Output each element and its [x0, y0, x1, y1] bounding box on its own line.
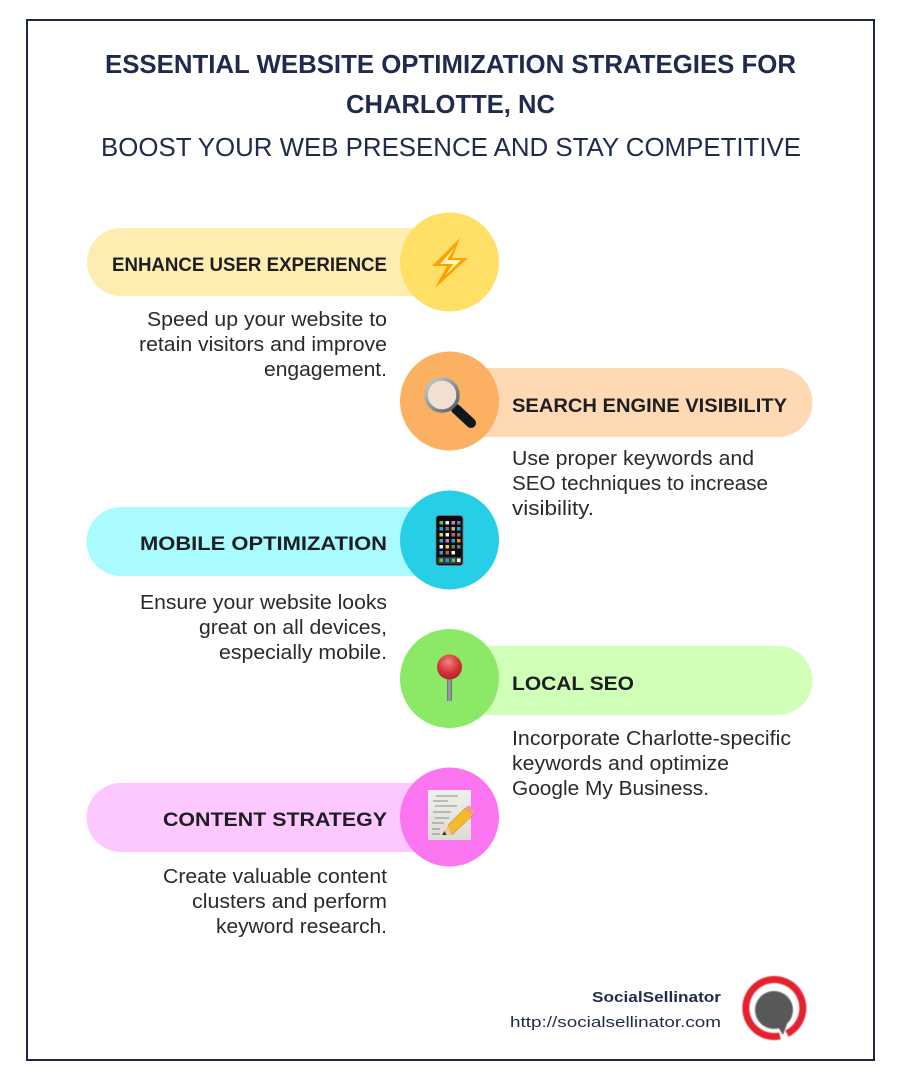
icon: memo and pencil: [428, 790, 474, 840]
description: clusters and perform: [192, 891, 387, 913]
heading: MOBILE OPTIMIZATION: [140, 533, 387, 555]
description: Google My Business.: [512, 778, 709, 800]
description: [512, 728, 791, 800]
logo: [746, 980, 803, 1037]
description: keyword research.: [216, 916, 387, 938]
description: [163, 866, 387, 938]
title block: [101, 49, 801, 162]
heading: ENHANCE USER EXPERIENCE: [112, 254, 387, 276]
description: great on all devices,: [199, 617, 387, 639]
website url: http://socialsellinator.com: [510, 1014, 721, 1031]
description: [512, 448, 768, 520]
circle: [400, 768, 499, 866]
description: engagement.: [264, 359, 387, 381]
pill: [460, 368, 813, 437]
panel: content strategy: [87, 768, 499, 938]
description: especially mobile.: [219, 642, 387, 664]
brand name: SocialSellinator: [592, 989, 721, 1006]
description: [140, 592, 387, 664]
heading: LOCAL SEO: [512, 673, 634, 695]
panel: enhance user experience: [87, 212, 499, 381]
description: Ensure your website looks: [140, 592, 387, 614]
title: ESSENTIAL WEBSITE OPTIMIZATION STRATEGIES FOR: [105, 49, 796, 79]
description: SEO techniques to increase: [512, 473, 768, 495]
icon: magnifying glass: [426, 379, 471, 423]
panel: local seo: [400, 629, 813, 800]
title: CHARLOTTE, NC: [346, 89, 555, 119]
pill: [87, 507, 440, 576]
subtitle: BOOST YOUR WEB PRESENCE AND STAY COMPETITIVE: [101, 132, 801, 162]
icon: lightning bolt: [432, 238, 468, 288]
icon: smartphone: [436, 516, 463, 566]
description: Create valuable content: [163, 866, 387, 888]
footer: brand: [510, 980, 803, 1037]
heading: SEARCH ENGINE VISIBILITY: [512, 395, 787, 417]
title: [105, 49, 796, 119]
heading: CONTENT STRATEGY: [163, 809, 387, 831]
pill: [87, 783, 440, 852]
description: visibility.: [512, 498, 594, 520]
description: retain visitors and improve: [139, 334, 387, 356]
description: keywords and optimize: [512, 753, 729, 775]
circle: [400, 490, 499, 590]
description: Speed up your website to: [147, 309, 387, 331]
description: [139, 309, 387, 381]
description: Incorporate Charlotte-specific: [512, 728, 791, 750]
icon: round pushpin: [437, 654, 462, 701]
circle: [400, 629, 499, 728]
circle: [400, 212, 499, 312]
pill: [87, 228, 440, 296]
circle: [400, 352, 499, 450]
pill: [460, 646, 813, 715]
panel: mobile optimization: [87, 490, 499, 664]
panel: search engine visibility: [400, 352, 813, 520]
description: Use proper keywords and: [512, 448, 754, 470]
